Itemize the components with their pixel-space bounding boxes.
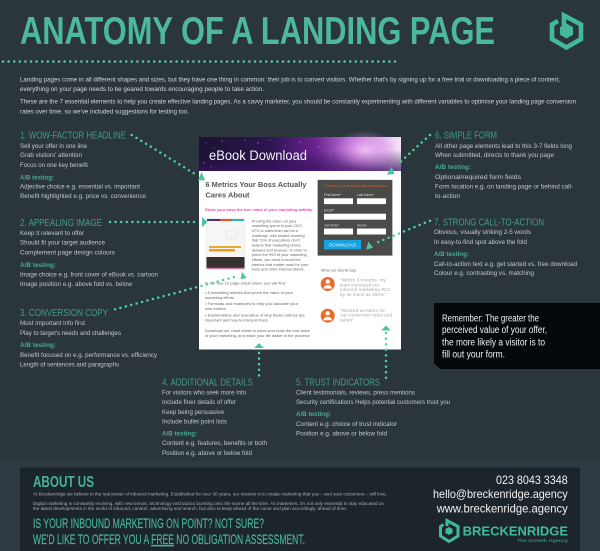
section 7: strong call-to-action: 7. STRONG CALL-TO-ACTION [434, 216, 544, 228]
mockup body copy: that 73% of executives don't [252, 238, 301, 243]
intro text: rates over time, so we've included suggestions for testing too. [20, 108, 189, 115]
arrow: details connector [254, 343, 264, 378]
mockup form: Email* [324, 208, 335, 212]
mockup form: First Name* [324, 193, 342, 197]
mockup headline: 6 Metrics Your Boss Actually [206, 180, 307, 189]
section 4: additional details [162, 376, 267, 457]
section 4: additional details: Include finer details of offer [162, 399, 236, 406]
section 6: simple form: All other page elements lead to this 3-7 fields long [435, 143, 572, 150]
mockup testimonials: “Within 3 months, my [340, 278, 387, 282]
mockup form: Last Name* [357, 193, 375, 197]
mockup body copy: believe that marketing drives [252, 242, 301, 248]
intro text: Landing pages come in all different shapes and sizes, but they have one thing in common: their job is to convert visitors. Whether that's by signing up for a free trial or downloading a piece of content, [20, 76, 560, 83]
mockup body copy: prove the ROI of your marketing [252, 252, 307, 257]
section 4: additional details: Position e.g. above or below fold [162, 450, 252, 457]
section 3: conversion copy: Play to target's needs and challenges [20, 330, 121, 337]
section 5: trust indicators: Position e.g. above or below fold [296, 431, 387, 438]
section 7: strong call-to-action: Call-to-action text e.g. get started vs. free download [434, 261, 577, 268]
icon: avatar one [321, 277, 335, 291]
mockup body copy: challenge, with studies showing [252, 233, 305, 238]
section 1: wow-factor headline: Adjective choice e.g. essential vs. important [20, 184, 140, 191]
section 6: simple form: A/B testing: [435, 164, 471, 171]
section 4: additional details: For visitors who seek more info [162, 390, 246, 396]
panel: footer [0, 461, 600, 551]
mockup body copy: CFO or sales team can be a [252, 228, 298, 233]
mockup body copy: own metrics [205, 306, 226, 311]
mockup header banner: eBook Download [209, 148, 307, 163]
icon: Breckenridge hexagon logo [552, 16, 581, 48]
section 1: wow-factor headline: Grab visitors' attention [20, 152, 82, 159]
mockup pink subhead: Show your boss the true value of your marketing activity. [205, 207, 313, 212]
section 1: wow-factor headline: 1. WOW-FACTOR HEADLINE [20, 130, 126, 142]
section 2: appealing image [20, 217, 158, 288]
mockup headline: Cares About [206, 190, 250, 199]
mockup body copy: metrics that matter most for your [252, 262, 309, 267]
section 1: wow-factor headline: Benefit highlighted e.g. price vs. convenience [20, 193, 146, 200]
arrow: copy connector [115, 272, 247, 309]
section 5: trust indicators [296, 376, 450, 438]
about us text: At Breckenridge we believe in the real power of inbound marketing. Established for over 30 years, our mission is to create marketing that you – and your customers – will love. [33, 492, 387, 497]
section 3: conversion copy: Most important info first [20, 320, 85, 327]
mockup form: 6 Metrics Your Boss Actually Cares About [324, 184, 387, 188]
panel: landing page mockup [199, 130, 401, 350]
contact details: hello@breckenridge.agency [433, 487, 568, 501]
section 6: simple form: When submitted, directs to thank you page [435, 152, 554, 159]
mockup body copy: demand and revenue. In order to [252, 247, 307, 252]
section 4: additional details: Keep being persuasive [162, 409, 224, 416]
section 2: appealing image: A/B testing: [20, 262, 56, 269]
mockup ebook cover image [206, 218, 245, 270]
intro text [20, 76, 576, 115]
contact details: 023 8043 3348 [496, 473, 568, 487]
mockup testimonials [321, 268, 393, 323]
section 1: wow-factor headline: A/B testing: [20, 174, 54, 181]
icon: avatar two [321, 309, 335, 323]
mockup testimonials: our conversion rates and [340, 313, 393, 318]
mockup download button: DOWNLOAD [329, 243, 357, 248]
mockup testimonials: by as much as 250%.” [340, 292, 388, 297]
mockup body copy: Proving the return on your [252, 218, 297, 223]
section 7: strong call-to-action: Obvious, visually striking 2-5 words [434, 229, 531, 236]
call to action text [33, 515, 305, 547]
contact details: www.breckenridge.agency [436, 502, 568, 516]
section 3: conversion copy: Benefit focused on e.g. performance vs. efficiency [20, 352, 158, 359]
mockup body copy: • Formulas and examples to help you calculate your [205, 301, 299, 306]
call to action text: IS YOUR INBOUND MARKETING ON POINT? NOT SURE? [33, 515, 264, 531]
mockup header banner [199, 130, 401, 171]
arrow: headline connector [132, 135, 205, 180]
arrow: form connector [387, 135, 430, 175]
section 6: simple form: Form location e.g. on landing page or behind call- [435, 184, 573, 191]
mockup body copy: boss and other internal clients. [252, 267, 305, 272]
section 2: appealing image: Should fit your target audience [20, 240, 105, 247]
mockup testimonials: inbound marketing ROI [340, 287, 390, 292]
mockup testimonials: “Worked wonders for [340, 308, 386, 313]
intro text: These are the 7 essential elements to help you create effective landing pages. As a savvy marketer, you should be constantly experimenting with different variables to optimise your landing page conversion [20, 98, 576, 105]
section 2: appealing image: 2. APPEALING IMAGE [20, 217, 102, 229]
arrow: call-to-action connector [366, 221, 430, 250]
footer logo: The Growth Agency [517, 538, 569, 543]
footer logo [440, 520, 569, 543]
mockup testimonials: What our clients say: [321, 268, 357, 273]
title dotted rule [3, 60, 398, 63]
section 5: trust indicators: A/B testing: [296, 411, 331, 418]
section 1: wow-factor headline [20, 130, 146, 200]
mockup testimonials: team increased our [340, 282, 379, 287]
mockup form: Job Role* [324, 224, 340, 228]
arrow: image connector [110, 217, 208, 227]
section 6: simple form [435, 130, 573, 200]
mockup body copy: of your marketing, and make your life easier in the process! [205, 333, 310, 338]
mockup body copy: marketing spend to your CEO, [252, 223, 303, 228]
footer logo: BRECKENRIDGE [463, 524, 568, 538]
section 6: simple form: to-action [435, 193, 461, 200]
about us text [33, 492, 387, 511]
section 4: additional details: Content e.g. features, benefits or both [162, 440, 267, 447]
about us text: the latest developments in the world of inbound, content, advertising and search, but also to keep ahead of the curve and plan accordingly, ahead of time. [33, 506, 347, 511]
section 4: additional details: A/B testing: [162, 431, 197, 438]
mockup body copy [205, 218, 310, 338]
section 2: appealing image: Image position e.g. above fold vs. below [20, 281, 132, 288]
section 3: conversion copy: A/B testing: [20, 342, 56, 349]
callout: remember: fill out your form. [442, 350, 505, 360]
section 5: trust indicators: 5. TRUST INDICATORS [296, 376, 380, 388]
mockup body copy: marketing efforts [205, 295, 234, 300]
mockup body copy: Download our cheat sheet to show your boss the true value [205, 328, 310, 333]
section 7: strong call-to-action: A/B testing: [434, 251, 469, 258]
section 3: conversion copy: 3. CONVERSION COPY [20, 307, 108, 319]
callout: remember: the more likely a visitor is to [442, 338, 545, 348]
call to action text: WE'D LIKE TO OFFER YOU A FREE NO OBLIGATION ASSESSMENT. [33, 531, 305, 547]
section 3: conversion copy: Length of sentences and paragraphs [20, 362, 119, 369]
section 7: strong call-to-action [434, 216, 577, 277]
section 4: additional details: 4. ADDITIONAL DETAILS [162, 376, 253, 388]
section 5: trust indicators: Security certifications Helps potential customers trust you [296, 399, 450, 406]
section 2: appealing image: Image choice e.g. front cover of eBook vs. cartoon [20, 272, 158, 278]
callout: remember: Remember: The greater the [442, 314, 539, 324]
section 6: simple form: 6. SIMPLE FORM [435, 130, 497, 142]
mockup body copy: efforts, you need to know the [252, 257, 301, 262]
arrow: trust connector [381, 326, 391, 378]
callout: remember: perceived value of your offer, [442, 325, 547, 336]
section 1: wow-factor headline: Focus on one key benefit [20, 162, 88, 169]
section 7: strong call-to-action: In easy-to-find spot above the fold [434, 239, 527, 246]
section 6: simple form: Optional/required form fields [435, 174, 521, 181]
about us heading: ABOUT US [33, 474, 94, 491]
mockup form: Sector [357, 224, 368, 228]
section 7: strong call-to-action: Colour e.g. contrasting vs. matching [434, 270, 534, 277]
mockup body copy: important and how to interpret them [205, 317, 268, 322]
callout: remember [434, 303, 600, 369]
mockup headline [206, 180, 307, 199]
section 5: trust indicators: Content e.g. choice of trust indicator [296, 421, 397, 428]
mockup testimonials: sales” [340, 317, 355, 322]
section 3: conversion copy [20, 307, 158, 369]
about us text: Digital marketing is constantly evolving, with new trends, technology and tactics bursting onto the scene all the time. As marketers, it's not only essential to stay educated on [33, 501, 384, 506]
mockup form [318, 180, 392, 256]
section 2: appealing image: Keep it relevant to offer [20, 230, 84, 237]
contact details [433, 473, 568, 516]
mockup body copy: • Explanations and scenarios of why these metrics are [205, 312, 305, 317]
section 1: wow-factor headline: Sell your offer in one line [20, 143, 87, 150]
mockup body copy: • 8 marketing metrics that prove the value of your [205, 290, 294, 295]
section 5: trust indicators: Client testimonials, reviews, press mentions [296, 390, 415, 396]
section 4: additional details: Include bullet point lists [162, 419, 227, 426]
mockup body copy: In our free 12-page cheat sheet, you will find: [205, 281, 286, 286]
intro text: everything on your page needs to be geared towards encouraging people to take action. [20, 86, 264, 93]
section 2: appealing image: Complement page design colours [20, 250, 115, 256]
